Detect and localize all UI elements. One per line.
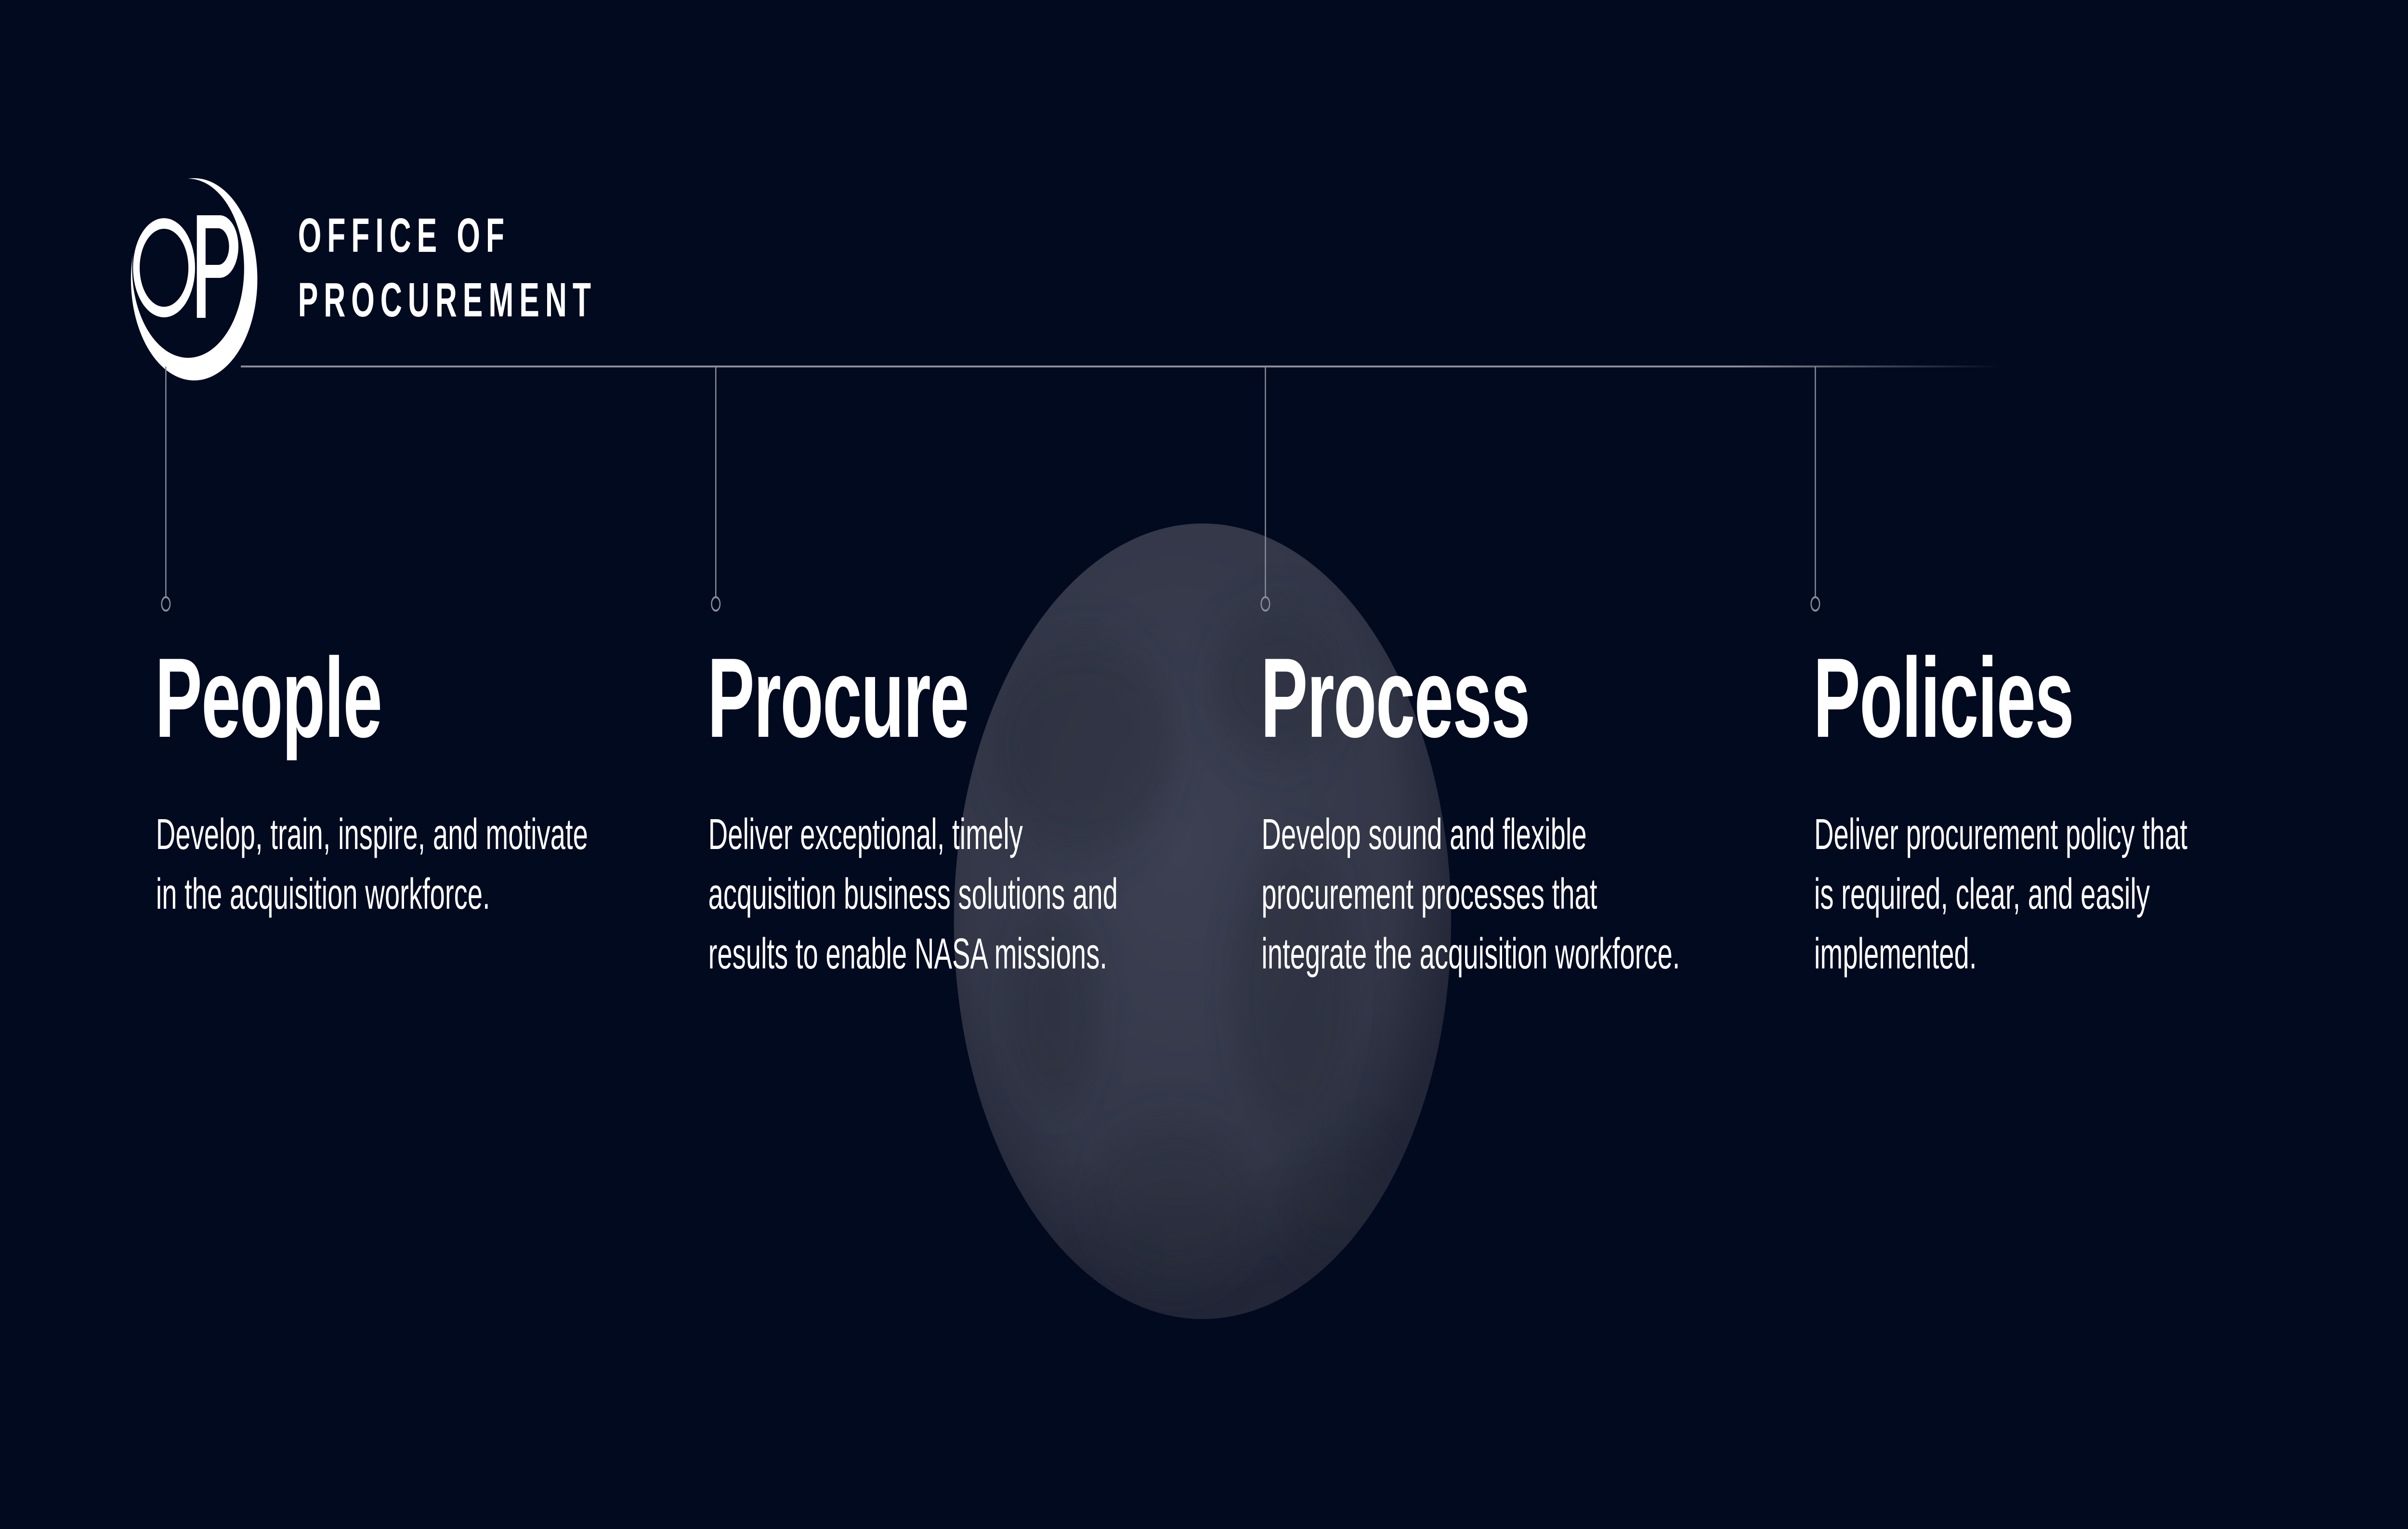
logo text: PROCUREMENT xyxy=(298,273,597,327)
text: Procure: results to enable NASA missions. xyxy=(708,929,1107,978)
heading: Policies: Policies xyxy=(1813,635,2073,761)
timeline xyxy=(162,366,2002,611)
text: Process: procurement processes that xyxy=(1261,869,1597,918)
logo text xyxy=(298,209,597,327)
text: Policies: is required, clear, and easily xyxy=(1814,869,2150,918)
column: People xyxy=(155,635,588,918)
column: Policies xyxy=(1813,635,2187,978)
logo xyxy=(131,178,257,380)
column: Process xyxy=(1261,635,1680,978)
moon xyxy=(954,523,1451,1319)
text: Procure: Deliver exceptional, timely xyxy=(708,810,1023,858)
text: People: Develop, train, inspire, and motivate xyxy=(156,810,588,858)
logo text: OFFICE OF xyxy=(298,209,510,262)
heading: Procure: Procure xyxy=(707,635,968,761)
text: Process: integrate the acquisition workforce. xyxy=(1261,929,1680,978)
text: Policies: Deliver procurement policy that xyxy=(1814,810,2187,858)
column: Procure xyxy=(707,635,1118,978)
text: Process: Develop sound and flexible xyxy=(1261,810,1587,858)
heading: People: People xyxy=(155,635,381,761)
heading: Process: Process xyxy=(1261,635,1530,761)
text: Policies: implemented. xyxy=(1814,929,1976,978)
text: People: in the acquisition workforce. xyxy=(156,869,490,918)
text: Procure: acquisition business solutions and xyxy=(708,869,1118,918)
